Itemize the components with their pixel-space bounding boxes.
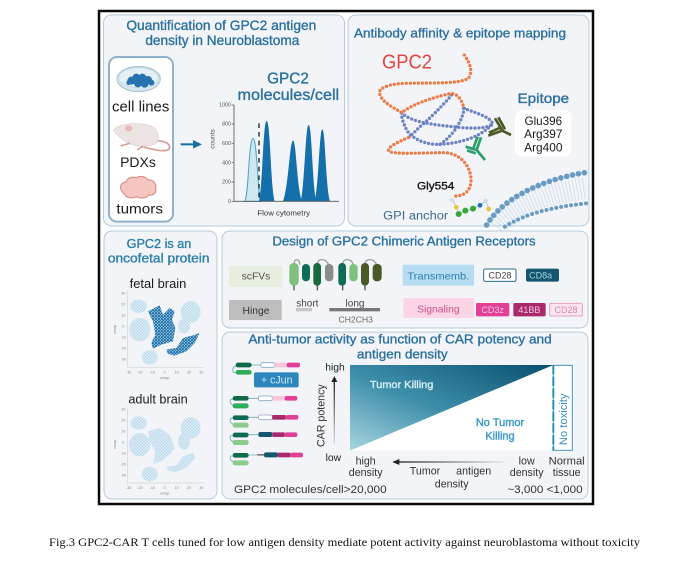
illustration: membrane [487, 172, 587, 227]
umap: fetal brain: 0 [164, 370, 166, 374]
label: Epitope: Epitope [517, 90, 569, 106]
panel title: design: Design of GPC2 Chimeric Antigen Receptors [272, 234, 536, 249]
histogram: flow cytometry: 600 [222, 141, 231, 147]
caption: Fig.3 GPC2-CAR T cells tuned for low antigen density mediate potent activity against neuroblastoma without toxicity [49, 537, 640, 549]
heading: GPC2 molecules per cell: molecules/cell [237, 87, 339, 104]
chart: potency vs density [350, 365, 572, 451]
axis: tumor antigen density [349, 455, 585, 491]
umap: adult brain: 10 [175, 486, 179, 490]
umap: fetal brain: 30 [121, 292, 125, 296]
panel title: anti-tumor: antigen density [357, 347, 448, 362]
umap: fetal brain: 20 [187, 370, 191, 374]
hinge option: long: CH2CH3 [338, 314, 373, 324]
panel title: antibody affinity: Antibody affinity & epitope mapping [354, 25, 566, 40]
histogram: flow cytometry: 1000 [219, 103, 231, 109]
axis: tumor antigen density: antigen [456, 465, 491, 477]
umap: fetal brain [113, 291, 204, 380]
label: tumors: tumors [116, 201, 163, 217]
tag: CD28 transmembrane: CD28 [489, 271, 511, 281]
tag: CD28 transmembrane [484, 269, 516, 281]
axis: tumor antigen density: tissue [553, 467, 581, 479]
tag: CD3z [476, 303, 509, 316]
umap: adult brain: -10 [121, 451, 126, 455]
icon: tumor [120, 176, 156, 198]
illustration: GPC2 protein chain [379, 55, 492, 196]
umap: fetal brain: umap [160, 376, 169, 380]
tag: Transmemb: Transmemb. [407, 271, 469, 282]
hinge option: short: short [296, 298, 319, 309]
axis: tumor antigen density: Normal [549, 455, 585, 467]
hinge option: long: long [346, 298, 364, 309]
tag: Signaling [403, 298, 474, 318]
histogram: flow cytometry [210, 103, 339, 218]
tag: 41BB [513, 303, 546, 316]
chart: potency vs density: No toxicity [558, 393, 570, 445]
tag: CD28 signaling: CD28 [555, 305, 577, 315]
panel: anti-tumor activity [222, 332, 588, 499]
umap: fetal brain: 20 [121, 303, 125, 307]
tag: Transmemb [403, 265, 474, 286]
umap: fetal brain: -30 [126, 370, 131, 374]
label: GPI anchor: GPI anchor [383, 208, 448, 222]
chart: potency vs density: Killing [485, 430, 515, 442]
panel: GPC2 is an oncofetal protein [104, 231, 217, 499]
umap: adult brain: 10 [121, 429, 125, 433]
umap: adult brain: -10 [150, 486, 155, 490]
axis: CAR potency: CAR potency [315, 384, 327, 447]
arrow: samples to cytometry [181, 140, 202, 149]
icon: GPI anchor glycan [450, 198, 491, 217]
histogram: flow cytometry: 800 [222, 122, 231, 128]
umap: adult brain: -30 [121, 473, 126, 477]
label: Gly554: Gly554 [417, 180, 454, 192]
umap: fetal brain: -20 [121, 347, 126, 351]
umap: adult brain: 30 [199, 486, 203, 490]
axis: tumor antigen density: density [510, 467, 544, 479]
umap: adult brain: -20 [121, 462, 126, 466]
label: adult brain: adult brain [128, 392, 188, 407]
tag: Signaling: Signaling [417, 304, 460, 315]
icon: antibody dark [488, 117, 511, 136]
panel title: oncofetal: GPC2 is an [127, 237, 191, 251]
icon: antibody green [466, 137, 485, 160]
axis: CAR potency: low [326, 453, 342, 464]
histogram: flow cytometry: counts [210, 129, 217, 149]
label: GPC2: GPC2 [382, 50, 432, 73]
panel: antibody affinity and epitope mapping [348, 15, 589, 227]
heading: GPC2 molecules per cell [237, 70, 339, 104]
callout: epitope residues: Arg400 [524, 141, 563, 154]
tag: scFVs: scFVs [242, 272, 270, 283]
umap: fetal brain: umap [113, 325, 117, 334]
panel: quantification of GPC2 antigen density [104, 15, 344, 226]
sample types box [109, 57, 173, 222]
umap: adult brain: 20 [121, 418, 125, 422]
panel title: quantification [126, 17, 316, 48]
panel title: anti-tumor [248, 332, 552, 362]
umap: adult brain: 0 [164, 486, 166, 490]
tag: cJun: + cJun [261, 375, 293, 387]
umap: adult brain: -30 [126, 486, 131, 490]
umap: fetal brain: -20 [137, 370, 143, 374]
umap: adult brain: 20 [187, 486, 191, 490]
chart: potency vs density: Tumor Killing [370, 380, 434, 391]
callout: epitope residues: Glu396 [524, 115, 562, 128]
figure frame [99, 11, 593, 504]
umap: adult brain: 0 [122, 440, 124, 444]
label: PDXs: PDXs [120, 154, 156, 170]
umap: fetal brain: 10 [121, 314, 125, 318]
heading: GPC2 molecules per cell: GPC2 [267, 70, 309, 87]
umap: fetal brain: 30 [199, 370, 203, 374]
callout: epitope residues: Arg397 [524, 128, 562, 141]
histogram: flow cytometry: 400 [222, 160, 231, 166]
umap: adult brain [113, 407, 204, 496]
tag: Hinge [229, 300, 282, 320]
label: fetal brain: fetal brain [130, 276, 186, 291]
hinge option: long [329, 298, 380, 324]
icon: culture dish [117, 66, 160, 92]
tag: Hinge: Hinge [242, 306, 270, 317]
axis: tumor antigen density: density [349, 467, 383, 479]
axis: tumor antigen density: low [519, 455, 535, 467]
histogram: flow cytometry: 200 [222, 180, 231, 186]
umap: adult brain: umap [160, 492, 169, 496]
axis: tumor antigen density: high [356, 455, 376, 467]
callout: epitope residues [515, 110, 572, 157]
label: molecules per cell values: GPC2 molecules/cell>20,000 [234, 484, 387, 496]
icon: mouse [113, 124, 170, 151]
umap: fetal brain: -10 [150, 370, 155, 374]
chart: potency vs density: No Tumor [476, 417, 524, 429]
label: cell lines: cell lines [112, 99, 169, 115]
label: molecules per cell values [234, 484, 583, 496]
histogram: flow cytometry: Flow cytometry [257, 209, 310, 218]
axis: tumor antigen density: Tumor [410, 465, 441, 477]
panel title: quantification: Quantification of GPC2 antigen [126, 17, 316, 33]
axis: CAR potency [315, 362, 345, 464]
panel title: oncofetal [108, 237, 209, 265]
icons: CAR constructs [230, 363, 303, 465]
umap: adult brain: -20 [137, 486, 143, 490]
tag: 41BB: 41BB [518, 305, 540, 315]
umap: fetal brain: 10 [175, 370, 179, 374]
umap: adult brain: umap [113, 440, 117, 449]
histogram: flow cytometry: 0 [228, 199, 231, 205]
tag: CD28 signaling [550, 303, 582, 316]
label: molecules per cell values: ~3,000 <1,000 [507, 484, 583, 496]
panel title: anti-tumor: Anti-tumor activity as function of CAR potency and [248, 332, 552, 347]
panel: design of GPC2 chimeric antigen receptors [222, 231, 588, 328]
tag: scFVs [229, 266, 282, 287]
panel title: quantification: density in Neuroblastoma [145, 32, 300, 48]
panel title: oncofetal: oncofetal protein [108, 251, 209, 265]
axis: CAR potency: high [325, 362, 345, 373]
umap: fetal brain: -10 [121, 336, 126, 340]
umap: fetal brain: 0 [122, 325, 124, 329]
tag: CD8a: CD8a [529, 271, 552, 281]
tag: CD3z: CD3z [481, 305, 504, 315]
umap: adult brain: 30 [121, 407, 125, 411]
umap: fetal brain: -30 [121, 358, 126, 362]
icon: scFv domains [289, 260, 382, 290]
tag: CD8a [526, 269, 559, 282]
axis: tumor antigen density: density [435, 479, 469, 491]
